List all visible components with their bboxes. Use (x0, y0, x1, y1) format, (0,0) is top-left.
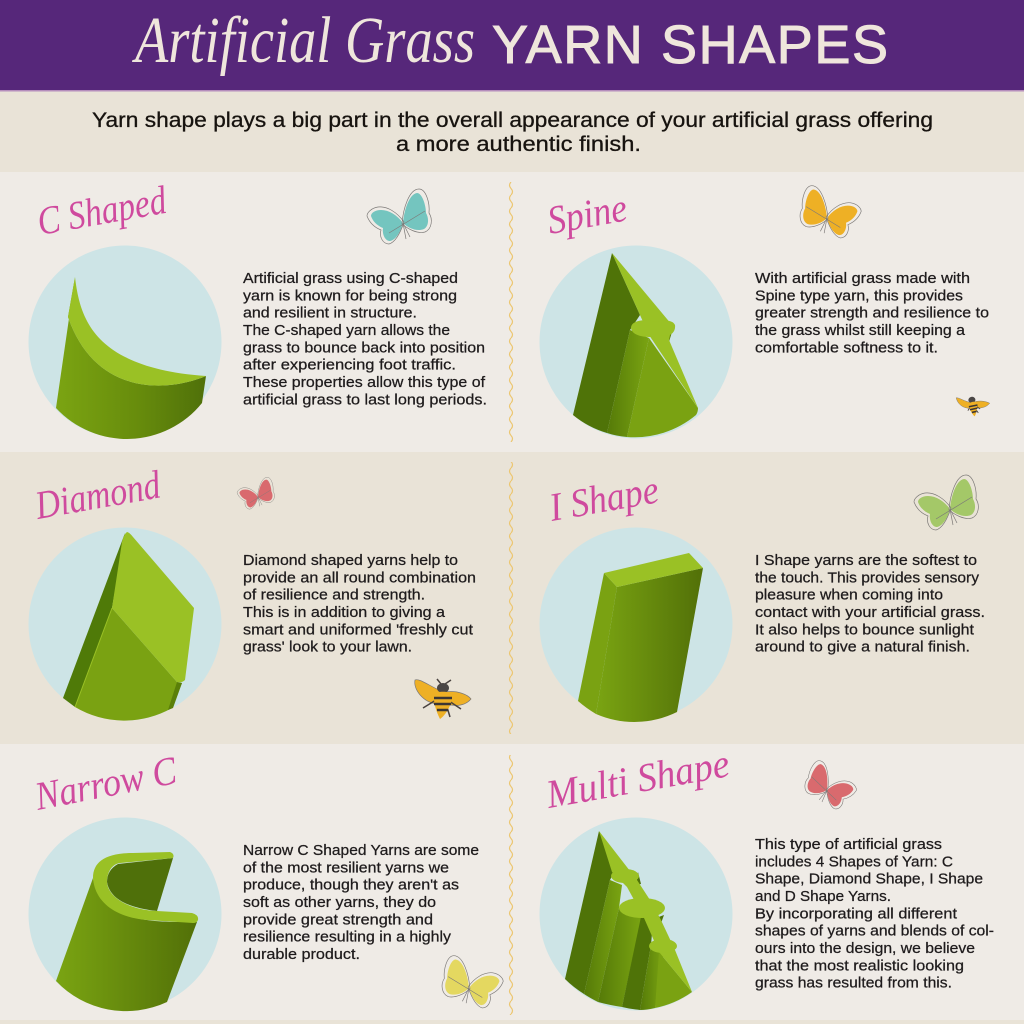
text: I Shape description: the touch. This provides sensory (755, 570, 980, 586)
panel: Multi Shape (540, 740, 994, 1010)
text: Multi Shape description: includes 4 Shapes of Yarn: C (755, 854, 953, 870)
heading: C Shaped: C Shaped (34, 177, 170, 244)
panel: Spine (540, 185, 992, 438)
panel: Narrow C (28, 747, 503, 1011)
spine nub (631, 320, 675, 337)
intro text: a more authentic finish. (396, 133, 641, 156)
text: C Shaped description: The C-shaped yarn allows the (243, 323, 450, 339)
text: I Shape description: around to give a natural finish. (755, 640, 970, 656)
icon: teal butterfly (367, 189, 431, 244)
text: Narrow C description: provide great strength and (243, 912, 433, 928)
illustration: C shaped yarn (28, 246, 222, 439)
text: Multi Shape description: that the most realistic looking (755, 958, 964, 974)
dividers: wavy column lines (508, 182, 514, 1015)
text: Multi Shape description: ours into the design, we believe (755, 941, 975, 957)
intro text: Yarn shape plays a big part in the overall appearance of your artificial grass offering (92, 109, 933, 132)
text: Narrow C description: of the most resilient yarns we (243, 860, 449, 876)
illustration: Narrow C yarn (28, 818, 222, 1011)
text: Spine description: Spine type yarn, this provides (755, 288, 963, 304)
text: Multi Shape description: and D Shape Yarns. (755, 889, 891, 905)
header banner (0, 0, 1024, 92)
icon: large bee (415, 679, 471, 719)
text: C Shaped description: artificial grass to last long periods. (243, 392, 487, 408)
heading: Diamond: Diamond (31, 462, 164, 528)
text: Spine description: With artificial grass made with (755, 271, 970, 287)
background band: row 2 (0, 452, 1024, 744)
text: Diamond description (243, 553, 476, 656)
text: Multi Shape description: grass has resulted from this. (755, 976, 952, 992)
text: Diamond description: provide an all round combination (243, 570, 476, 586)
text: Diamond description: grass' look to your lawn. (243, 640, 412, 656)
title: YARN SHAPES: YARN SHAPES (492, 15, 888, 75)
text: I Shape description: contact with your artificial grass. (755, 605, 985, 621)
text: Narrow C description: produce, though they aren't as (243, 878, 459, 894)
icon: red butterfly (801, 759, 861, 812)
illustration: Spine yarn (540, 246, 732, 438)
text: Spine description: comfortable softness to it. (755, 340, 938, 356)
text: Narrow C description: durable product. (243, 947, 360, 963)
icon: small bee (956, 391, 992, 419)
heading: Spine: Spine (544, 185, 630, 243)
icon: red butterfly (237, 477, 274, 509)
text: Multi Shape description: This type of artificial grass (755, 837, 942, 853)
text: I Shape description: I Shape yarns are the softest to (755, 553, 977, 569)
text: C Shaped description: Artificial grass using C-shaped (243, 271, 458, 287)
text: Diamond description: This is in addition to giving a (243, 605, 446, 621)
text: Narrow C description: Narrow C Shaped Yarns are some (243, 843, 479, 859)
text: C Shaped description (243, 271, 487, 408)
icon: green butterfly (914, 475, 978, 530)
text: I Shape description (755, 553, 985, 656)
text: Multi Shape description: shapes of yarns and blends of col- (755, 924, 994, 940)
heading: I Shape: I Shape (545, 466, 662, 530)
panel: I Shape (540, 466, 985, 722)
text: Multi Shape description: By incorporating all different (755, 906, 957, 922)
text: Narrow C description: soft as other yarns, they do (243, 895, 436, 911)
text: Narrow C description (243, 843, 479, 963)
spine nubs (611, 869, 677, 953)
text: C Shaped description: after experiencing foot traffic. (243, 358, 456, 374)
heading: Narrow C: Narrow C (30, 747, 181, 819)
illustration: I Shape yarn (540, 528, 732, 722)
text: Narrow C description: resilience resulting in a highly (243, 930, 452, 946)
text: Spine description (755, 271, 989, 356)
text: Spine description: the grass whilst still keeping a (755, 323, 966, 339)
text: C Shaped description: These properties allow this type of (243, 375, 486, 391)
illustration: Diamond yarn (28, 528, 222, 721)
text: I Shape description: It also helps to bounce sunlight (755, 622, 974, 638)
text: Diamond description: smart and uniformed 'freshly cut (243, 622, 473, 638)
intro band (0, 92, 1024, 172)
text: C Shaped description: yarn is known for being strong (243, 288, 457, 304)
background band: row 3 (0, 744, 1024, 1020)
text: I Shape description: pleasure when coming into (755, 588, 943, 604)
panel: Diamond (28, 462, 476, 721)
heading: Multi Shape: Multi Shape (542, 740, 733, 817)
title script: Artificial Grass: Artificial Grass (132, 4, 475, 77)
text: Diamond description: of resilience and strength. (243, 588, 425, 604)
background band: row 1 (0, 172, 1024, 452)
text: C Shaped description: grass to bounce back into position (243, 340, 485, 356)
text: Multi Shape description (755, 837, 994, 992)
icon: orange butterfly (800, 186, 861, 238)
text: Spine description: greater strength and resilience to (755, 306, 989, 322)
intro text (92, 109, 933, 156)
text: Diamond description: Diamond shaped yarns help to (243, 553, 458, 569)
text: C Shaped description: and resilient in structure. (243, 306, 417, 322)
text: Multi Shape description: Shape, Diamond Shape, I Shape (755, 872, 983, 888)
panel: C Shaped (28, 177, 487, 439)
icon: yellow butterfly (442, 956, 503, 1008)
background band: bottom edge (0, 1020, 1024, 1024)
illustration: Multi Shape yarn (540, 818, 732, 1010)
